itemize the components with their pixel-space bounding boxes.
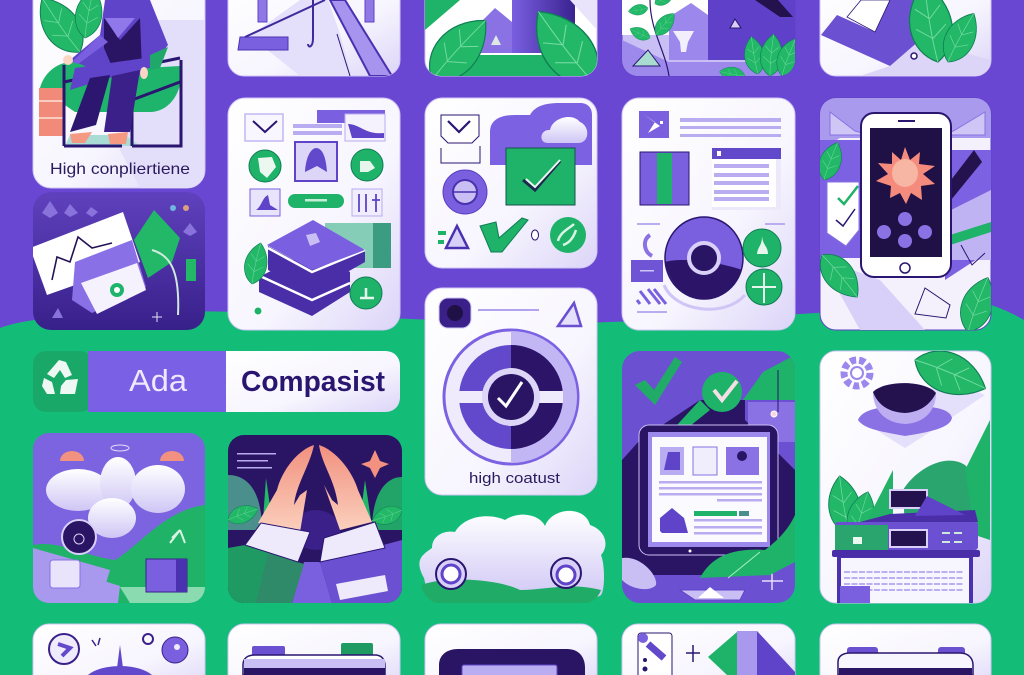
icon: green badge plus	[746, 269, 782, 305]
icon: right hand	[319, 445, 372, 530]
icon: tablet	[639, 425, 778, 555]
icon: top leaf	[908, 341, 993, 406]
icon: printer top	[860, 490, 978, 522]
icon: lavender wedge	[250, 0, 352, 76]
icon: stick figure	[170, 530, 185, 543]
icon: saucer	[858, 407, 952, 436]
icon: right wheel	[551, 558, 581, 588]
icon: status dots	[170, 205, 189, 211]
icon: little house	[660, 508, 688, 533]
icon: cloud body	[419, 511, 605, 601]
panel: Compasist label	[226, 351, 400, 412]
icon: triangle	[558, 303, 581, 326]
icon: coral domes	[60, 451, 184, 461]
icon: clouds	[46, 457, 185, 538]
icon: white paper	[847, 0, 890, 32]
icon: header bar and image	[317, 110, 385, 141]
icon: home button	[900, 263, 910, 273]
icon: sparkle	[762, 565, 783, 590]
icon: dark panel	[951, 150, 982, 200]
icon: dark diagonal	[755, 0, 793, 17]
icon: green hill	[33, 505, 205, 603]
icon: outline zigzag	[961, 245, 985, 265]
icon: printer body	[832, 522, 980, 557]
icon: small diamond	[532, 230, 538, 240]
panel: Ada label	[88, 351, 226, 412]
icon: little triangle	[633, 50, 660, 66]
icon: small peak	[680, 590, 745, 600]
icon: green cushion and bricks	[39, 62, 181, 146]
icon: green check square	[506, 148, 575, 205]
icon: check badge	[488, 374, 534, 420]
icon: striped column	[640, 152, 689, 205]
icon: teal backdrop	[325, 223, 391, 268]
icon: big green tick	[480, 218, 528, 252]
icon: note card	[638, 633, 672, 675]
panel: bottom row camera two	[820, 624, 991, 675]
panel: bottom row tools	[622, 624, 795, 675]
icon: green tick	[635, 357, 682, 405]
icon: stacked boxes	[259, 220, 365, 316]
icon: green leaf shape	[134, 210, 196, 315]
icon: outline triangle	[915, 288, 950, 318]
icon: arch behind hands	[292, 510, 340, 550]
panel: plant and house	[622, 0, 796, 76]
icon: checklist tag	[827, 182, 859, 246]
icon: green badge one	[743, 229, 781, 267]
icon: folded sheet	[737, 631, 795, 675]
icon: mid purple band	[820, 140, 991, 280]
icon: plant stem with leaves	[628, 0, 674, 76]
icon: lens ring	[62, 520, 96, 554]
icon: left hand	[258, 445, 314, 532]
icon: left leaf	[428, 20, 486, 76]
panel: printer and plants	[820, 341, 993, 607]
icon: purple ring button	[443, 170, 487, 214]
icon: green circle badge	[350, 277, 382, 309]
text: Compasist: Compasist	[241, 366, 385, 398]
icon: plus	[686, 645, 700, 662]
icon: centre gap	[292, 562, 332, 603]
icon: lavender header area	[820, 98, 991, 150]
icon: small tile right	[352, 189, 382, 216]
icon: check badge	[677, 372, 742, 430]
panel: tablet with checks	[622, 351, 795, 603]
panel: approvals with check	[425, 98, 597, 268]
panel: mountains and leaves	[424, 0, 598, 76]
icon: lower band	[622, 40, 780, 76]
panel: chart on dark card	[30, 192, 205, 330]
icon: lower right leaf	[953, 272, 1002, 337]
icon: left and right bars	[258, 0, 374, 22]
chart: dial	[444, 330, 578, 464]
icon: paper tray	[837, 557, 973, 607]
panel: cloud car	[419, 511, 605, 603]
icon: left foliage	[225, 475, 272, 530]
panel: paper and leaves	[820, 0, 991, 76]
decorative text ticks	[637, 223, 785, 313]
icon: lower left leaf	[811, 245, 869, 306]
icon: house	[481, 8, 512, 53]
icon: checklist leaf	[814, 139, 847, 183]
icon: pin line	[777, 370, 779, 412]
icon: green recycle tab	[33, 351, 93, 412]
icon: purple block	[708, 0, 795, 60]
icon: white paper with line chart	[30, 212, 140, 295]
icon: plant leaves	[824, 420, 990, 543]
icon: bowl	[873, 383, 936, 424]
text lines: header	[293, 124, 342, 135]
icon: corner leaves	[719, 34, 795, 76]
icon: white sky	[622, 0, 708, 35]
icon: lower pale sweep	[820, 258, 925, 330]
icon: green paperclip circle	[550, 217, 586, 253]
background: green hill	[0, 298, 1024, 675]
icon: four dots on screen	[877, 212, 932, 248]
panel: document with disc	[622, 98, 795, 330]
icon: green circle left	[249, 150, 281, 182]
icon: phone	[861, 113, 951, 277]
icon: camera two	[838, 647, 973, 675]
icon: small tile left	[250, 189, 280, 216]
icon: green road	[421, 580, 601, 603]
icon: lower lavender blob	[622, 558, 656, 589]
panel: bottom row card one	[33, 624, 205, 675]
icon: ring left	[49, 634, 79, 664]
icon: envelope flaps	[830, 112, 985, 135]
icon: gear spike	[83, 645, 157, 675]
icon: green ground	[461, 55, 597, 76]
icon: ball right	[162, 637, 188, 663]
icon: ruler base	[238, 37, 288, 50]
icon: top green area	[743, 355, 795, 400]
icon: sparkle	[152, 312, 162, 322]
icon: triangle	[438, 226, 468, 248]
panel: cloud landscape	[33, 433, 205, 603]
icon: disc	[665, 217, 743, 299]
icon: slanted triangle ruler	[330, 0, 392, 76]
icon: purple slab	[512, 0, 575, 53]
icon: camera	[243, 643, 385, 675]
text lines: small header	[237, 453, 276, 468]
panel: drafting tools	[228, 0, 400, 76]
icon: white cloud	[541, 117, 587, 143]
icon: purple tab	[631, 260, 663, 282]
text: Ada: Ada	[129, 363, 188, 398]
icon: bottom leaf	[700, 515, 795, 578]
icon: small white card with eye	[81, 263, 146, 314]
icon: lavender side shadow	[120, 20, 204, 188]
icon: small triangles	[730, 19, 741, 28]
panel: interface board with stacked box	[228, 98, 400, 330]
icon: small ring	[143, 634, 153, 644]
icon: window	[712, 148, 781, 210]
icon: small leaf	[935, 6, 986, 69]
icon: arc under disc	[664, 285, 745, 309]
icon: big leaf	[903, 0, 958, 66]
icon: chair frame	[64, 58, 181, 146]
icon: green diamond	[708, 632, 737, 675]
icon: person body	[63, 0, 168, 144]
panel: phone with checklist	[811, 98, 1002, 337]
icon: top mark	[111, 445, 129, 451]
icon: green circle right	[351, 149, 383, 181]
icon: compass legs	[245, 0, 325, 46]
icon: hatch marks	[637, 289, 666, 304]
icon: pale slope	[33, 548, 110, 603]
icon: right sleeve	[320, 522, 402, 603]
icon: little drop	[911, 53, 917, 59]
chart: green progress bar	[694, 511, 749, 516]
icon: purple folded sheet	[821, 0, 925, 66]
icon: lavender pane	[748, 402, 795, 442]
icon: swirl	[645, 235, 652, 256]
icon: rounded device	[439, 649, 585, 675]
text lines: tablet body	[659, 481, 762, 534]
icon: dark blob	[622, 400, 795, 575]
icon: purple folder	[72, 240, 146, 313]
icon: small tile	[50, 560, 80, 588]
icon: white tree shape	[673, 31, 694, 52]
text: high compliance caption: High conpliertiene	[50, 161, 190, 178]
text: high contrast caption: high coatust	[469, 470, 561, 487]
icon: logo tile	[639, 111, 669, 138]
panel: Ada Compasist banner	[33, 351, 400, 412]
icon: faint triangles	[42, 201, 197, 318]
icon: ghost tile	[295, 142, 337, 181]
icon: sun on screen	[876, 147, 935, 204]
icon: left sleeve	[228, 523, 310, 603]
icon: green pill	[288, 194, 344, 208]
panel: high contrast dial	[425, 288, 597, 495]
panel: bottom row device	[425, 624, 597, 675]
icon: right foliage	[360, 477, 405, 530]
icon: small leaf	[241, 241, 271, 286]
decorative arrow line	[478, 309, 539, 311]
icon: purple block	[146, 559, 187, 592]
panel: seated person, high compliance	[28, 0, 205, 188]
icon: camera lens square	[439, 298, 471, 328]
icon: right leaf	[536, 10, 597, 76]
icon: house lavender	[669, 3, 708, 60]
icon: lavender cast shadow	[860, 380, 985, 448]
icon: green dot	[254, 307, 262, 315]
icon: tiny marks	[92, 638, 100, 646]
icon: envelope tag	[441, 115, 480, 163]
icon: background leaves	[40, 0, 102, 53]
text lines: heading	[680, 118, 781, 137]
icon: coral sparkle	[361, 450, 389, 478]
icon: envelope	[245, 114, 283, 141]
panel: bottom row camera	[228, 624, 400, 675]
icon: gear	[844, 360, 870, 386]
icon: left wheel	[436, 559, 466, 589]
icon: purple cloud shape	[490, 103, 592, 165]
panel: hands	[225, 435, 405, 603]
icon: thumbnails	[660, 447, 759, 475]
